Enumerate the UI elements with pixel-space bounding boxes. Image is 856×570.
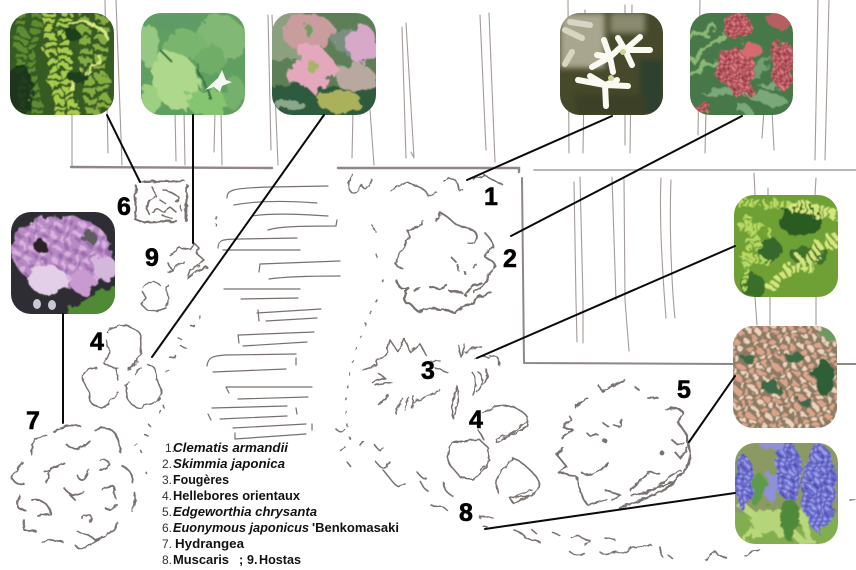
sketch: lawn strokes bbox=[207, 186, 340, 439]
photo: clematis armandii bbox=[560, 13, 663, 115]
plant numbers: 6 bbox=[117, 193, 131, 221]
legend: plant list: Fougères bbox=[173, 473, 229, 487]
plant symbol: 1 clematis bbox=[349, 175, 502, 197]
plant symbol: 8 muscaris border bbox=[135, 216, 855, 560]
sketch: fence posts and walls bbox=[71, 0, 856, 364]
legend: plant list: Clematis armandii bbox=[173, 441, 289, 455]
legend: plant list: 5. bbox=[162, 505, 172, 519]
legend: plant list: 2. bbox=[162, 457, 172, 471]
plant symbol: 5 edgeworthia bbox=[557, 380, 690, 508]
legend: plant list bbox=[162, 441, 399, 567]
legend: plant list: 7. bbox=[162, 537, 172, 551]
photo: hydrangea bbox=[11, 212, 120, 320]
photo: skimmia japonica bbox=[690, 13, 793, 115]
legend: plant list: 1. bbox=[165, 441, 175, 455]
legend: plant list: Skimmia japonica bbox=[173, 457, 285, 471]
plant numbers: 7 bbox=[26, 407, 40, 435]
legend: plant list: 8. bbox=[162, 553, 172, 567]
plant symbol: 6 euonymus square bbox=[135, 181, 187, 222]
legend: plant list: 9. bbox=[247, 553, 257, 567]
plant numbers: 5 bbox=[677, 376, 691, 404]
plant numbers: 8 bbox=[459, 499, 473, 527]
photo: hellebore bbox=[272, 13, 376, 115]
photo: ferns bbox=[734, 195, 838, 297]
legend: plant list: ; bbox=[239, 553, 243, 567]
plant symbol: 7 hydrangea bbox=[12, 425, 136, 548]
plant symbol: 9 hostas bbox=[141, 243, 207, 311]
legend: plant list: 3. bbox=[162, 473, 172, 487]
photo: hosta bbox=[141, 13, 245, 115]
legend: plant list: Hellebores orientaux bbox=[173, 489, 300, 503]
legend: plant list: Euonymous japonicus bbox=[173, 521, 309, 535]
plant numbers: 3 bbox=[421, 357, 435, 385]
photo: muscari bbox=[735, 443, 838, 544]
plant numbers: 1 bbox=[484, 183, 498, 211]
photo: edgeworthia chrysantha bbox=[733, 326, 837, 428]
plant numbers bbox=[26, 183, 691, 527]
legend: plant list: Muscaris bbox=[173, 553, 229, 567]
plant numbers: 4 bbox=[90, 328, 104, 356]
plant symbol: 3 ferns bbox=[363, 338, 499, 418]
legend: plant list: 'Benkomasaki bbox=[312, 521, 399, 535]
plant symbol: 2 skimmia bbox=[395, 213, 495, 313]
legend: plant list: 6. bbox=[162, 521, 172, 535]
plant numbers: 4 bbox=[469, 406, 483, 434]
plant symbol: 4 hellebores right bbox=[448, 406, 540, 503]
legend: plant list: Hostas bbox=[259, 553, 301, 567]
leader lines bbox=[63, 115, 742, 529]
legend: plant list: 4. bbox=[162, 489, 172, 503]
plant numbers: 9 bbox=[145, 244, 159, 272]
plant numbers: 2 bbox=[503, 245, 517, 273]
legend: plant list: Edgeworthia chrysanta bbox=[173, 505, 317, 519]
plant symbol: 4 hellebores left bbox=[83, 325, 162, 408]
photo: euonymus japonicus bbox=[10, 13, 114, 115]
legend: plant list: Hydrangea bbox=[175, 537, 245, 551]
